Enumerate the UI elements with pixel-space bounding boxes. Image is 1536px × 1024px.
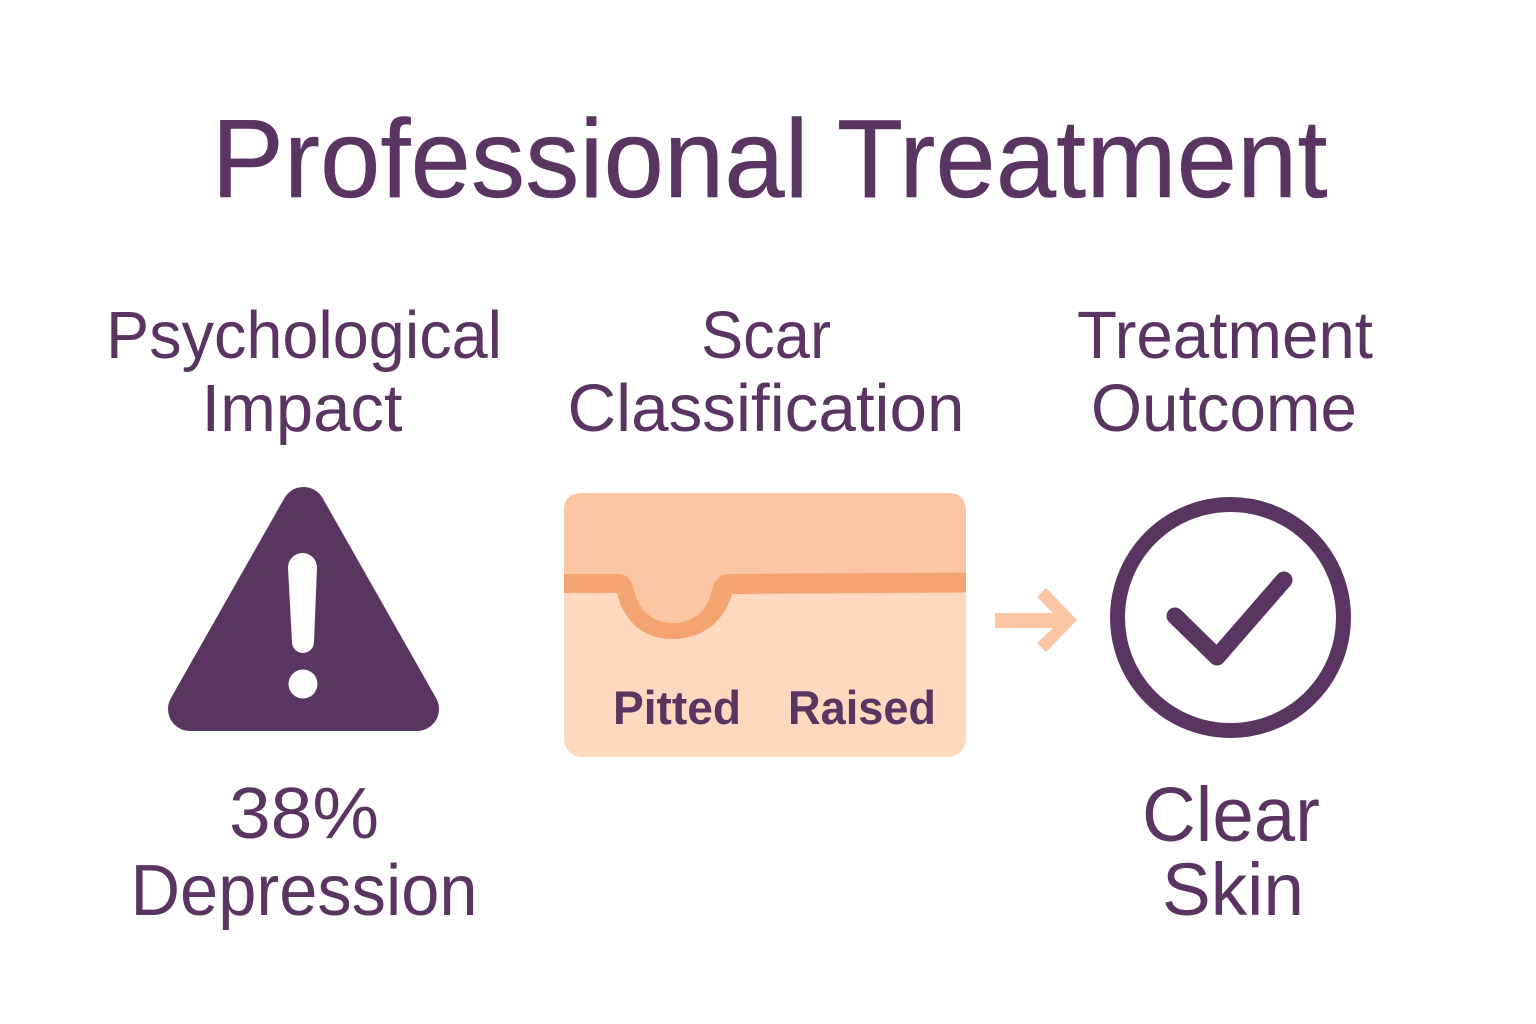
result: clear skin: Skin [1162,848,1304,931]
heading: treatment outcome: Treatment [1077,298,1373,373]
heading: psychological impact: Impact [202,371,403,446]
heading: scar classification: Scar [701,298,831,373]
statistic: 38% depression: Depression [130,851,478,931]
statistic: 38% depression: 38% [229,774,379,854]
result: clear skin: Clear [1142,772,1320,858]
icon: warning triangle [190,509,417,709]
arrow [995,588,1077,652]
heading: treatment outcome [1077,298,1373,446]
label: raised: Raised [788,681,936,734]
heading: treatment outcome: Outcome [1091,371,1357,446]
panel: psychological impact [106,298,502,931]
icon: check circle [1118,504,1344,730]
heading: scar classification [568,298,964,446]
result: clear skin [1142,772,1320,931]
statistic: 38% depression [130,774,478,931]
heading: scar classification: Classification [568,371,964,446]
label: pitted: Pitted [613,681,741,734]
diagram: skin cross-section [564,493,966,757]
title: Professional Treatment [212,97,1328,221]
panel: scar classification [564,298,966,757]
panel: treatment outcome [1077,298,1373,931]
heading: psychological impact [106,298,502,446]
heading: psychological impact: Psychological [106,298,502,373]
